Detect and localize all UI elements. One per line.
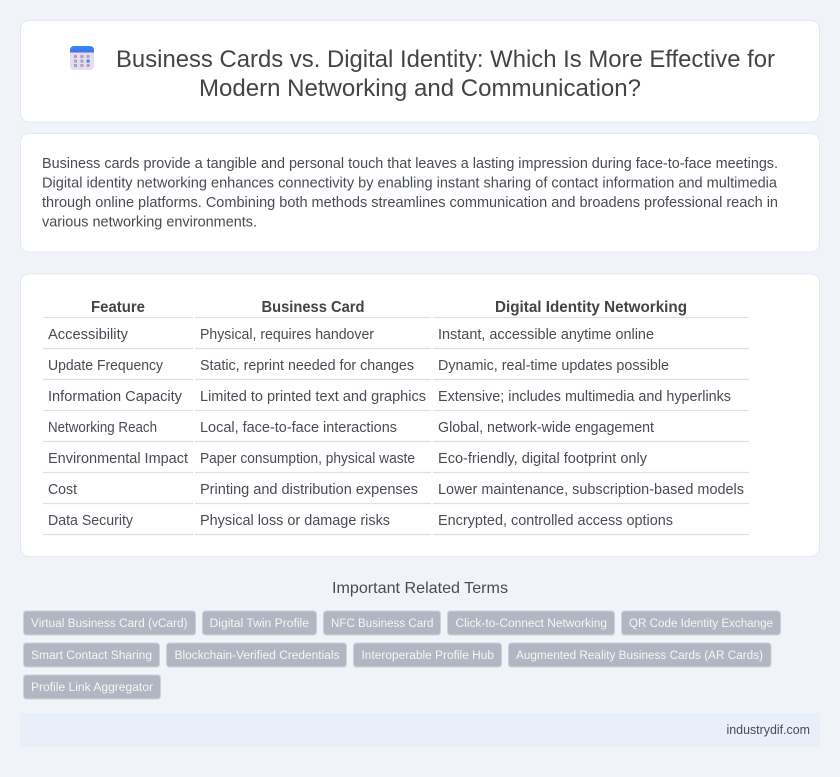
tag: NFC Business Card: [331, 616, 434, 630]
tag: [202, 611, 316, 635]
row: information capacity: Information Capacity: [48, 389, 183, 405]
footer source text: industrydif.com: [726, 723, 810, 737]
row: networking reach: Global, network-wide engagement: [438, 420, 654, 436]
tag: [24, 611, 196, 635]
tag: Profile Link Aggregator: [31, 680, 153, 694]
intro text panel: [20, 134, 820, 252]
row: networking reach: Networking Reach: [48, 420, 157, 436]
row: data security: Data Security: [48, 513, 134, 529]
row: update frequency: Static, reprint needed for changes: [200, 358, 414, 374]
table header row: Business Card: [262, 299, 364, 316]
row: environmental impact: Paper consumption, physical waste: [200, 451, 415, 467]
tag: Click-to-Connect Networking: [456, 616, 607, 630]
row: update frequency: Dynamic, real-time updates possible: [438, 358, 669, 374]
row: accessibility: [48, 327, 654, 343]
footer bar: [20, 713, 820, 747]
tag: Augmented Reality Business Cards (AR Cards): [516, 648, 763, 662]
row: information capacity: Extensive; includes multimedia and hyperlinks: [438, 389, 731, 405]
title: Business Cards vs. Digital Identity: Which Is More Effective for: [116, 46, 775, 73]
row: data security: [48, 513, 673, 529]
tag: [354, 643, 502, 667]
row: information capacity: Limited to printed text and graphics: [200, 389, 426, 405]
row: update frequency: [48, 358, 669, 374]
row: networking reach: [48, 420, 654, 436]
row: environmental impact: Eco-friendly, digital footprint only: [438, 451, 648, 467]
row: cost: Cost: [48, 482, 77, 498]
row: accessibility: Instant, accessible anytime online: [438, 327, 654, 343]
related terms heading: Important Related Terms: [332, 580, 508, 597]
intro paragraph: Digital identity networking enhances connectivity by enabling instant sharing of contact information and multimedia: [42, 176, 777, 192]
tag: [448, 611, 614, 635]
tag: [324, 611, 440, 635]
row: information capacity: [48, 389, 731, 405]
tag: [166, 643, 346, 667]
comparison table panel: [20, 274, 820, 556]
table header row: [91, 299, 687, 316]
header panel: [20, 20, 820, 122]
intro paragraph: [42, 156, 778, 230]
related terms tags: [24, 611, 780, 699]
row: data security: Physical loss or damage risks: [200, 513, 390, 529]
tag: Digital Twin Profile: [210, 616, 309, 630]
row: networking reach: Local, face-to-face interactions: [200, 420, 397, 436]
tag: [508, 643, 771, 667]
row: cost: Printing and distribution expenses: [200, 482, 418, 498]
tag: [24, 643, 160, 667]
row: environmental impact: Environmental Impact: [48, 451, 188, 467]
tag: Smart Contact Sharing: [31, 648, 152, 662]
row: data security: Encrypted, controlled access options: [438, 513, 673, 529]
row: update frequency: Update Frequency: [48, 358, 164, 374]
row: cost: Lower maintenance, subscription-based models: [438, 482, 744, 498]
tag: [622, 611, 780, 635]
intro paragraph: various networking environments.: [42, 214, 257, 230]
tag: Virtual Business Card (vCard): [31, 616, 188, 630]
intro paragraph: through online platforms. Combining both methods streamlines communication and broadens professional reach in: [42, 195, 778, 211]
table header row: Feature: [91, 299, 145, 316]
tag: Blockchain-Verified Credentials: [174, 648, 340, 662]
tag: [24, 675, 160, 699]
intro paragraph: Business cards provide a tangible and personal touch that leaves a lasting impression during face-to-face meetings.: [42, 156, 778, 172]
title: [116, 46, 775, 102]
title: Modern Networking and Communication?: [199, 75, 641, 102]
row: cost: [48, 482, 744, 498]
row: accessibility: Accessibility: [48, 327, 129, 343]
icon: calendar: [70, 46, 94, 70]
tag: QR Code Identity Exchange: [629, 616, 773, 630]
row: environmental impact: [48, 451, 648, 467]
table header row: Digital Identity Networking: [495, 299, 687, 316]
row: accessibility: Physical, requires handover: [200, 327, 374, 343]
tag: Interoperable Profile Hub: [362, 648, 494, 662]
